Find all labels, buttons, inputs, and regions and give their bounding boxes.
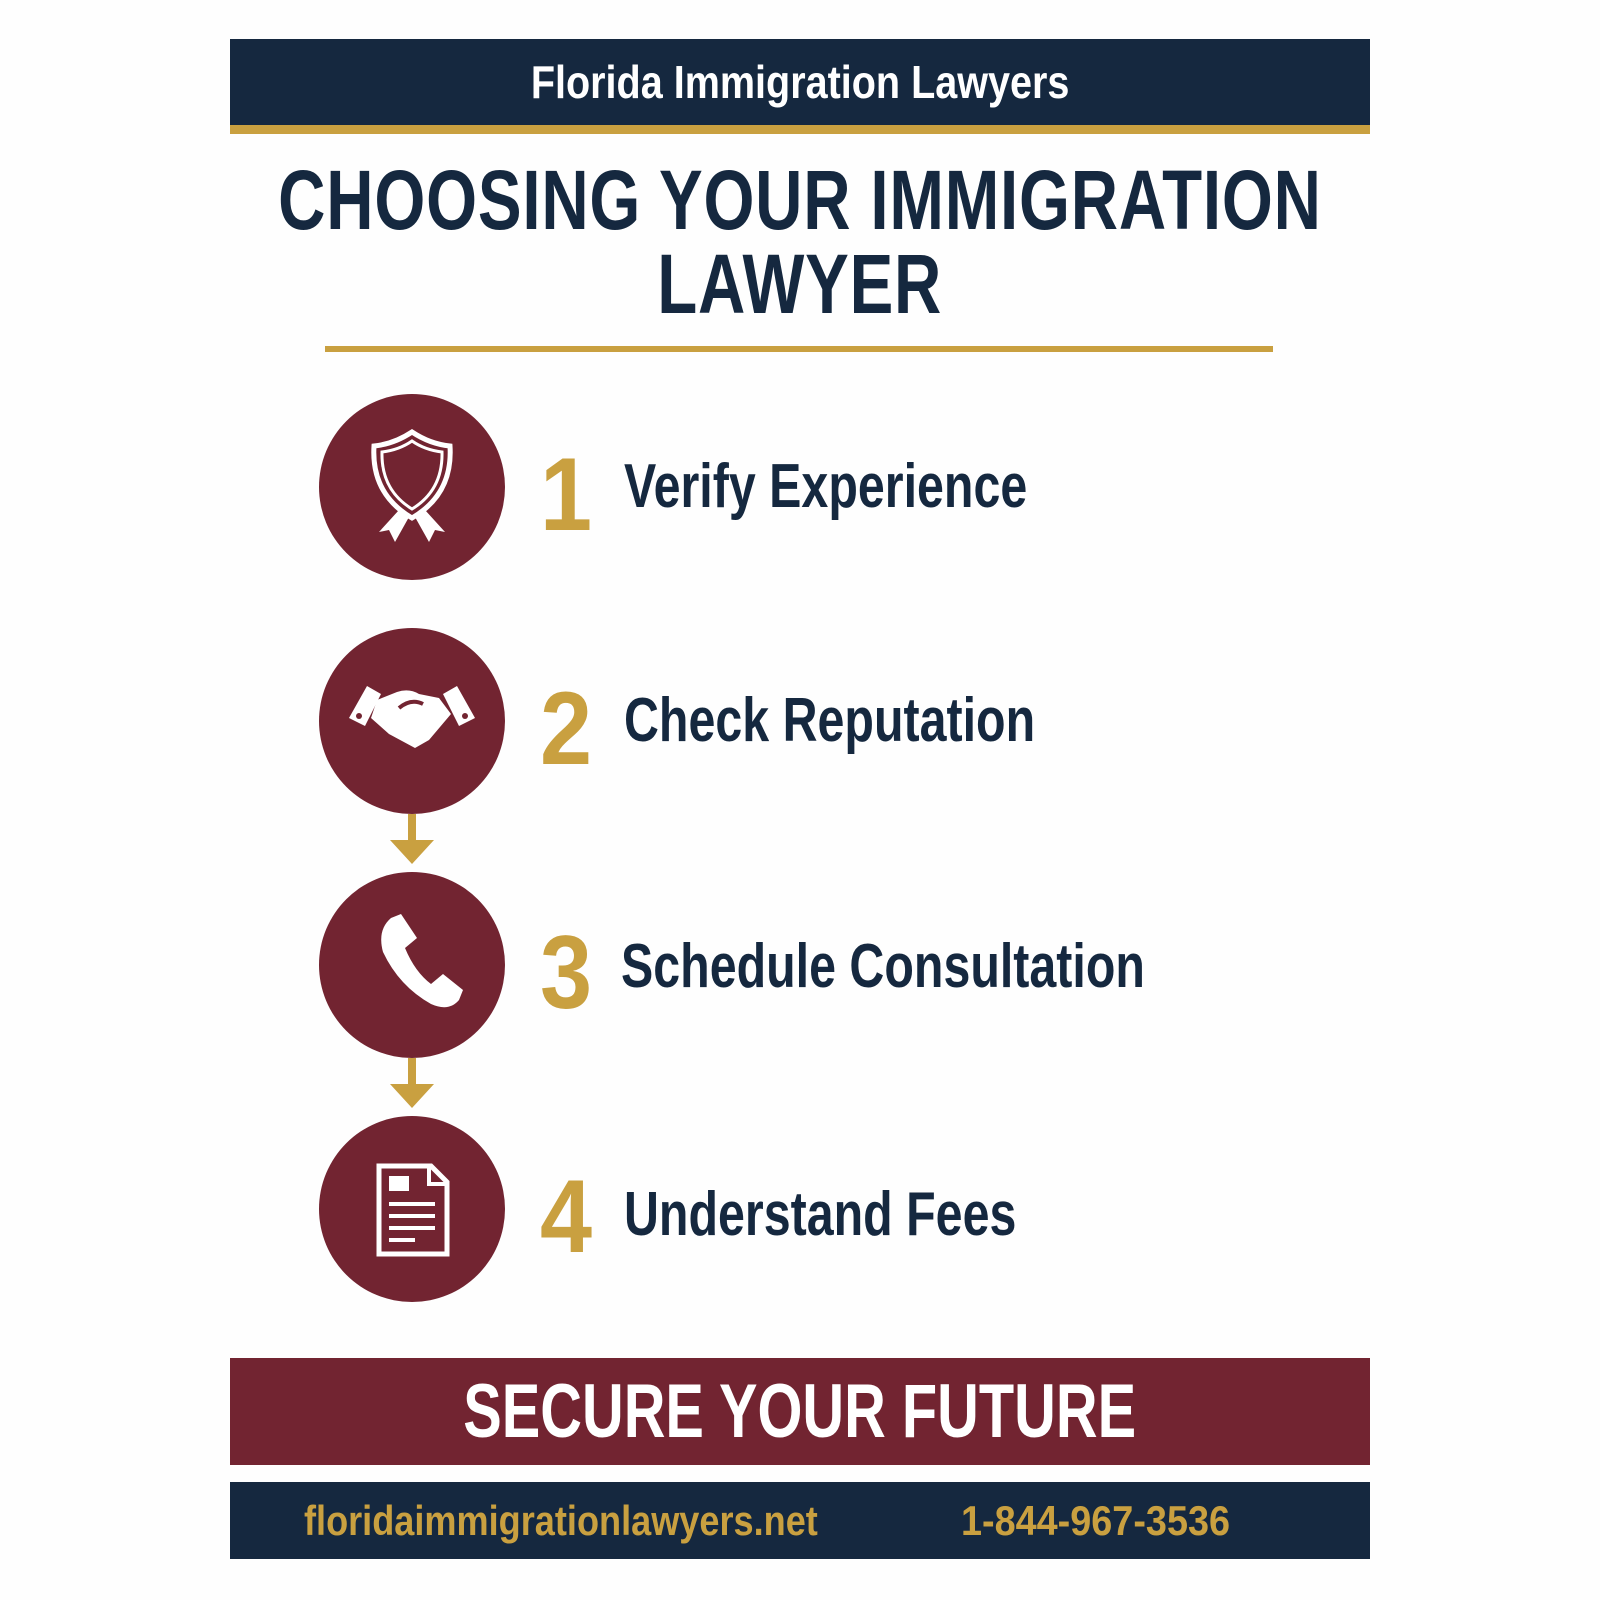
phone: 1-844-967-3536 [961, 1497, 1230, 1544]
banner: secure your future: SECURE YOUR FUTURE [464, 1369, 1136, 1454]
gold divider [325, 346, 1273, 352]
arrow 3 to 4 [390, 1058, 434, 1108]
title: CHOOSING YOUR IMMIGRATION [278, 153, 1322, 247]
label 1: Verify Experience [624, 452, 1027, 521]
number 3: 3 [540, 915, 592, 1031]
icon: phone [319, 872, 505, 1058]
icon: shield [319, 394, 505, 580]
label 3: Schedule Consultation [621, 932, 1145, 1001]
number 4: 4 [540, 1159, 592, 1275]
label 2: Check Reputation [624, 686, 1035, 755]
step 3 [319, 872, 1145, 1058]
header bar [230, 39, 1370, 134]
icon: document [319, 1116, 505, 1302]
step 4 [319, 1116, 1016, 1302]
step 2 [319, 628, 1035, 814]
website: floridaimmigrationlawyers.net [304, 1497, 818, 1544]
arrow 2 to 3 [390, 814, 434, 864]
step 1 [319, 394, 1027, 580]
title [278, 153, 1322, 331]
title: LAWYER [658, 237, 942, 331]
banner: secure your future [230, 1358, 1370, 1465]
number 1: 1 [540, 437, 592, 553]
header bar: Florida Immigration Lawyers [531, 56, 1069, 108]
footer: contact [230, 1482, 1370, 1559]
label 4: Understand Fees [624, 1180, 1016, 1249]
number 2: 2 [540, 671, 592, 787]
icon: handshake [319, 628, 505, 814]
